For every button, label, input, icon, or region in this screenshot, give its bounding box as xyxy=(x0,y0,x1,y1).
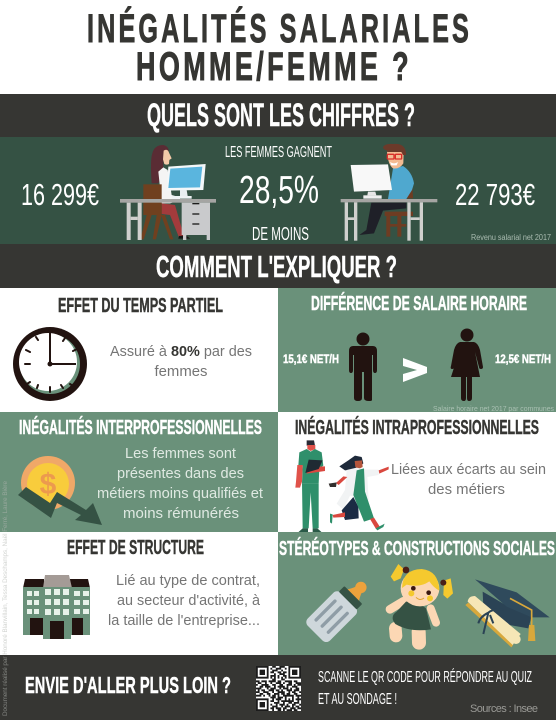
panel: effet du temps partiel: femmes xyxy=(154,364,208,380)
heading: EFFET DE STRUCTURE xyxy=(67,537,204,559)
panel: effet de structure xyxy=(0,532,278,655)
icon: graduation cap xyxy=(465,579,550,647)
text: présentes dans des xyxy=(117,466,244,482)
icon: greater than xyxy=(403,358,427,382)
heading: EFFET DU TEMPS PARTIEL xyxy=(58,295,223,317)
text: les femmes gagnent: LES FEMMES GAGNENT xyxy=(225,144,332,161)
qr instructions: ET AU SONDAGE ! xyxy=(318,691,397,708)
text: Liées aux écarts au sein xyxy=(391,462,546,478)
icon: baby bottle xyxy=(304,572,376,644)
panel: inégalités interprofessionnelles xyxy=(0,412,278,532)
icon: falling coin xyxy=(18,456,102,525)
panel: chiffres xyxy=(0,137,556,244)
text xyxy=(97,446,263,522)
text: des métiers xyxy=(428,482,505,498)
icon: falling coin: $ xyxy=(40,468,57,501)
panel: effet du temps partiel xyxy=(0,288,278,412)
icon: building xyxy=(23,575,90,639)
icon: man xyxy=(349,332,377,401)
text: métiers moins qualifiés et xyxy=(97,486,263,502)
text: Les femmes sont xyxy=(125,446,236,462)
heading: expliquer: COMMENT L'EXPLIQUER ? xyxy=(156,249,397,284)
icon: running nurse xyxy=(329,456,389,530)
footer xyxy=(0,655,556,720)
icon: clock xyxy=(13,327,87,401)
text: Assuré à 80% par des xyxy=(110,344,252,360)
icon: doll xyxy=(390,564,453,643)
sources: Sources : Insee xyxy=(470,703,538,715)
band: comment l'expliquer xyxy=(0,244,556,288)
heading: INÉGALITÉS INTERPROFESSIONNELLES xyxy=(19,416,262,439)
text xyxy=(391,462,546,498)
text xyxy=(108,573,261,629)
icon: woman at desk xyxy=(120,145,216,240)
source note: Salaire horaire net 2017 par communes xyxy=(433,406,554,413)
title xyxy=(87,6,472,89)
band: quels sont les chiffres xyxy=(0,94,556,137)
icon: man at desk xyxy=(341,144,437,241)
panel: inégalités intraprofessionnelles xyxy=(278,412,556,534)
women salary: 16 299€ xyxy=(21,177,99,212)
title: HOMME/FEMME ? xyxy=(136,45,412,89)
vertical credit: Document réalisé par Honoré Blanvillain, Tessa Deschamps, Naël Ferré, Laure Bière xyxy=(2,481,9,716)
men hourly: 15,1€ NET/H xyxy=(283,352,339,366)
text: la taille de l'entreprise... xyxy=(108,613,260,629)
icon: woman xyxy=(451,328,483,401)
qr code xyxy=(256,666,301,711)
qr instructions xyxy=(318,667,532,708)
text: Lié au type de contrat, xyxy=(116,573,260,589)
text: au secteur d'activité, à xyxy=(117,593,261,609)
call to action: ENVIE D'ALLER PLUS LOIN ? xyxy=(25,672,231,698)
panel: différence de salaire horaire xyxy=(278,288,556,413)
percentage: 28,5% xyxy=(239,169,319,212)
panel: stéréotypes et constructions sociales xyxy=(278,532,556,655)
icon: doctor xyxy=(295,440,325,534)
text: de moins: DE MOINS xyxy=(252,224,309,244)
text: moins rémunérés xyxy=(123,506,239,522)
